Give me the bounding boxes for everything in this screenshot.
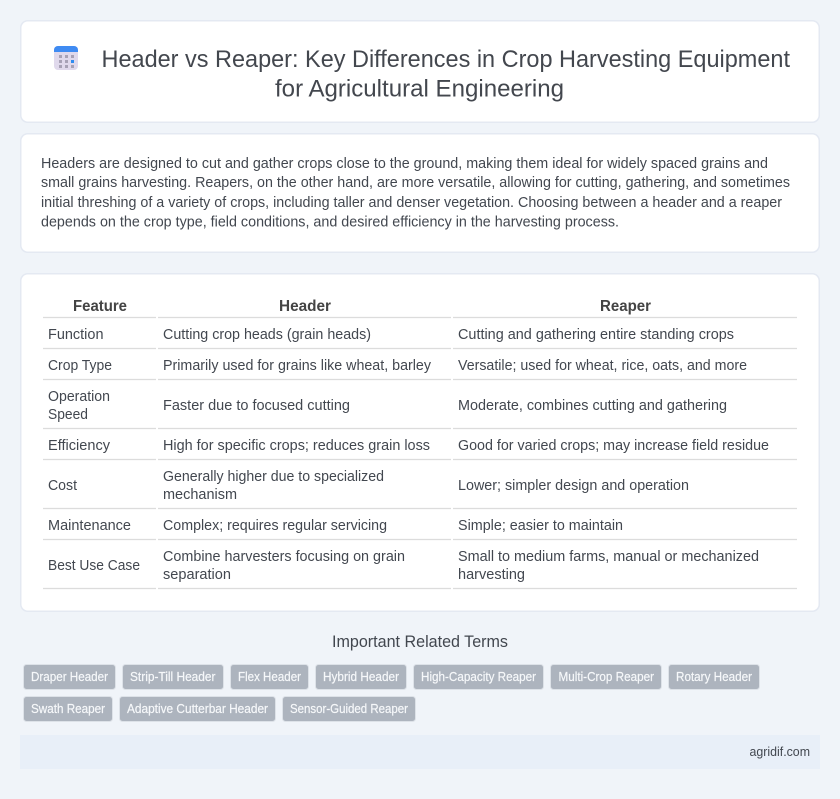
row: efficiency: Efficiency (48, 438, 111, 454)
row: cost: mechanism (163, 487, 237, 503)
row: function (48, 327, 734, 343)
row: efficiency (48, 438, 769, 454)
text block: introduction: depends on the crop type, field conditions, and desired efficiency in the harvesting process. (41, 214, 619, 230)
panel: comparison table (21, 274, 819, 611)
table heading row: Feature (73, 298, 127, 315)
tags: related terms: Draper Header (31, 670, 108, 684)
text block: introduction (41, 156, 790, 230)
text block: introduction: Headers are designed to cut and gather crops close to the ground, making them ideal for widely spaced grains and (41, 156, 768, 172)
row: crop type: Crop Type (48, 358, 112, 374)
title: for Agricultural Engineering (275, 76, 564, 102)
row: maintenance (48, 518, 623, 534)
row: operation speed: Faster due to focused cutting (163, 398, 350, 414)
panel: introduction (21, 134, 819, 252)
row: crop type (48, 358, 747, 374)
tags: related terms (24, 664, 760, 722)
text block: introduction: initial threshing of a variety of crops, including taller and denser vegetation. Choosing between a header and a reaper (41, 195, 782, 211)
row: function: Cutting crop heads (grain heads) (163, 327, 371, 343)
table heading row (73, 298, 651, 315)
row: best use case: Small to medium farms, manual or mechanized (458, 549, 759, 565)
tags: related terms: Flex Header (238, 670, 301, 684)
row: operation speed: Operation (48, 389, 110, 405)
row: efficiency: Good for varied crops; may increase field residue (458, 438, 769, 454)
title: Header vs Reaper: Key Differences in Crop Harvesting Equipment (102, 46, 790, 73)
row: best use case (48, 549, 759, 583)
row: maintenance: Complex; requires regular servicing (163, 518, 387, 534)
title (102, 46, 790, 102)
row: operation speed (48, 389, 727, 423)
row: function: Cutting and gathering entire standing crops (458, 327, 734, 343)
row: crop type: Versatile; used for wheat, rice, oats, and more (458, 358, 747, 374)
icon: calendar (54, 46, 78, 70)
row: function: Function (48, 327, 104, 343)
footer (20, 735, 820, 769)
row: best use case: Best Use Case (48, 558, 140, 574)
row: maintenance: Simple; easier to maintain (458, 518, 623, 534)
footer: site name: agridif.com (750, 744, 810, 759)
row: crop type: Primarily used for grains like wheat, barley (163, 358, 432, 374)
row: cost: Lower; simpler design and operation (458, 478, 689, 494)
tags: related terms: Swath Reaper (31, 702, 105, 716)
tags: related terms: Hybrid Header (323, 670, 399, 684)
tags: related terms: Strip-Till Header (130, 670, 216, 684)
row: maintenance: Maintenance (48, 518, 131, 534)
tags: related terms: Multi-Crop Reaper (558, 670, 654, 684)
row: best use case: separation (163, 567, 231, 583)
text block: introduction: small grains harvesting. Reapers, on the other hand, are more versatile, allowing for cutting, gathering, and sometimes (41, 175, 790, 191)
row: cost (48, 469, 689, 503)
row: cost: Generally higher due to specialized (163, 469, 384, 485)
tags: related terms: High-Capacity Reaper (421, 670, 536, 684)
heading: important related terms: Important Related Terms (332, 633, 508, 651)
table heading row: Header (279, 298, 331, 315)
row: best use case: harvesting (458, 567, 525, 583)
tags: related terms: Rotary Header (676, 670, 752, 684)
panel: title card (21, 21, 819, 122)
row: best use case: Combine harvesters focusing on grain (163, 549, 405, 565)
row: efficiency: High for specific crops; reduces grain loss (163, 438, 430, 454)
row: operation speed: Moderate, combines cutting and gathering (458, 398, 727, 414)
tags: related terms: Sensor-Guided Reaper (290, 702, 408, 716)
table heading row: Reaper (600, 298, 651, 315)
tags: related terms: Adaptive Cutterbar Header (127, 702, 268, 716)
row: operation speed: Speed (48, 407, 88, 423)
row: cost: Cost (48, 478, 77, 494)
